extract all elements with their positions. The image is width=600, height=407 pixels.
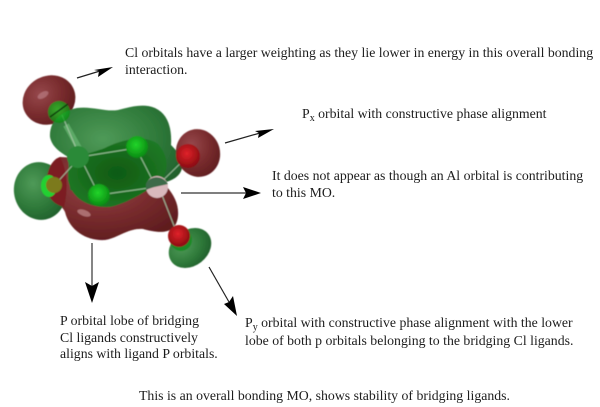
text: Py orbital: Py orbital with constructive phase alignment with the lower [245, 315, 573, 333]
text: Py orbital: lobe of both p orbitals belonging to the bridging Cl ligands. [245, 333, 573, 348]
arrow: to Px text [225, 129, 274, 143]
atom: aluminium [146, 176, 168, 198]
atoms: red terminal [176, 144, 200, 168]
text: Cl orbitals weighting: interaction. [125, 62, 187, 76]
orbital lobe: lower right green [161, 220, 219, 276]
arrow: to Py text [209, 267, 237, 316]
text: bridging lobe [60, 313, 218, 361]
arrow: to Cl orbitals text [77, 67, 113, 78]
orbital lobe: left red overlap [47, 157, 67, 207]
orbital lobe: right red [171, 124, 225, 182]
text: bridging lobe: aligns with ligand P orbitals. [60, 346, 218, 361]
text: Al orbital [272, 168, 583, 200]
text: bridging lobe: P orbital lobe of bridging [60, 313, 199, 328]
text: Al orbital: to this MO. [272, 184, 335, 200]
text: Al orbital: It does not appear as though an Al orbital is contributing [272, 168, 583, 183]
arrow: to bridging lobe text [85, 243, 99, 303]
text: Py orbital [245, 315, 573, 348]
text: Px orbital: Px orbital with constructive phase alignment [302, 106, 546, 124]
text: Cl orbitals weighting: Cl orbitals have a larger weighting as they lie lower in energy in this overall bonding [125, 45, 593, 60]
atoms: chlorine green [48, 101, 70, 123]
text: bridging lobe: Cl ligands constructively [60, 330, 198, 344]
text: conclusion: This is an overall bonding MO, shows stability of bridging ligands. [139, 388, 510, 403]
orbital lobe: left green [9, 157, 71, 225]
orbital lobe: upper bonding green [50, 106, 182, 200]
inner ring lobe [68, 139, 167, 207]
orbital lobe: lower bonding red [48, 157, 178, 240]
orbital lobe: upper left red [14, 66, 84, 134]
highlights [36, 89, 50, 101]
text: Cl orbitals weighting [125, 45, 593, 76]
bonds [53, 115, 188, 236]
arrow: to Al text [181, 187, 261, 199]
